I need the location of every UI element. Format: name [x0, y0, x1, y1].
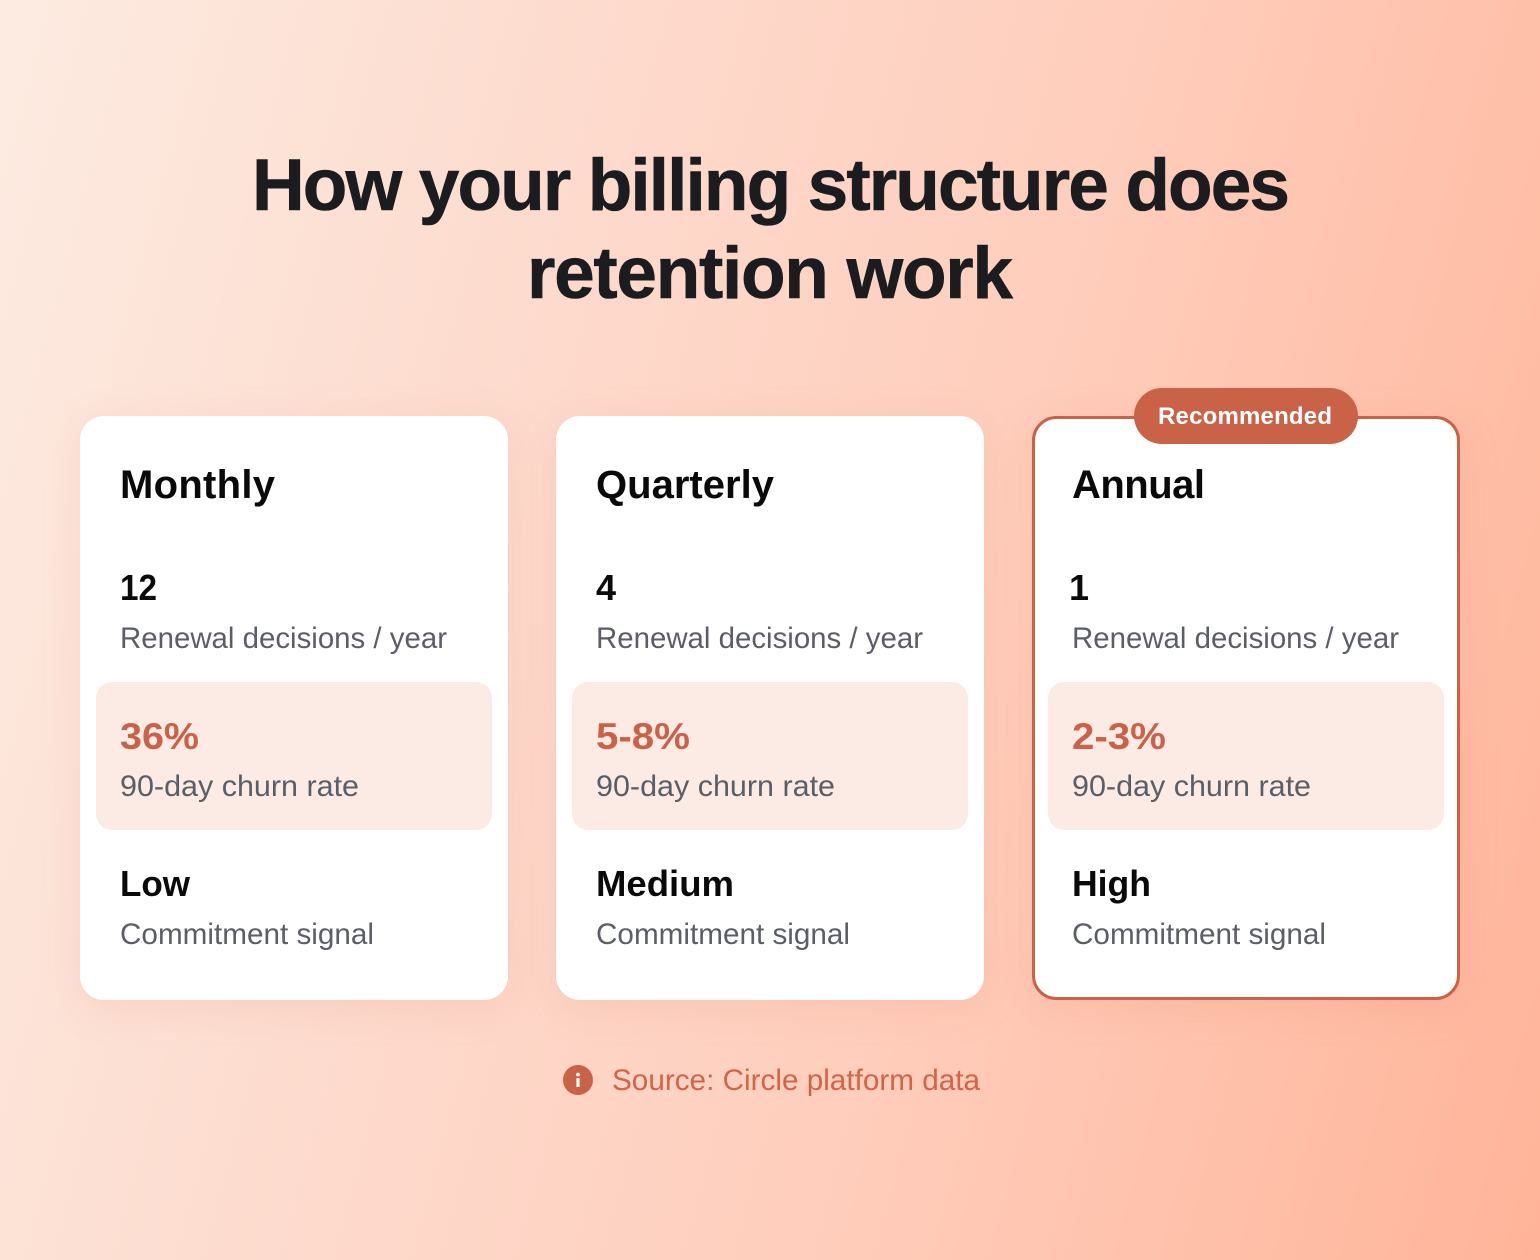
highlight: churn annual: 2-3%: [1072, 716, 1166, 757]
stat: renewal decisions annual: 1: [1069, 567, 1089, 608]
panel: monthly: [80, 416, 508, 1000]
title: retention work: [527, 233, 1013, 314]
stat: renewal decisions quarterly: 4: [596, 567, 616, 608]
stat: renewal decisions monthly: [120, 567, 447, 655]
stat: commitment quarterly: Medium: [596, 863, 734, 904]
heading: annual: Annual: [1072, 463, 1205, 507]
heading: quarterly: Quarterly: [596, 463, 775, 507]
stat: commitment annual: High: [1072, 863, 1151, 904]
highlight: churn quarterly: 90-day churn rate: [596, 770, 835, 803]
title: [252, 145, 1290, 314]
heading: monthly: Monthly: [120, 463, 276, 507]
highlight: churn annual: 90-day churn rate: [1072, 770, 1311, 803]
badge: recommended: Recommended: [1158, 403, 1332, 430]
stat: commitment monthly: Low: [120, 863, 191, 904]
panel: annual: [1034, 388, 1458, 998]
stat: commitment monthly: [120, 863, 374, 951]
title: How your billing structure does: [252, 145, 1290, 226]
stat: renewal decisions quarterly: Renewal decisions / year: [596, 622, 923, 655]
stat: renewal decisions monthly: Renewal decisions / year: [120, 622, 447, 655]
badge: recommended: [1134, 388, 1358, 444]
highlight: churn annual: [1048, 682, 1444, 830]
stat: commitment quarterly: Commitment signal: [596, 918, 850, 951]
highlight: churn monthly: 90-day churn rate: [120, 770, 359, 803]
stat: renewal decisions quarterly: [596, 567, 923, 655]
panel: quarterly: [556, 416, 984, 1000]
highlight: churn quarterly: 5-8%: [596, 716, 690, 757]
highlight: churn quarterly: [572, 682, 968, 830]
stat: commitment quarterly: [596, 863, 850, 951]
highlight: churn monthly: [96, 682, 492, 830]
stat: renewal decisions monthly: 12: [120, 567, 157, 608]
stat: renewal decisions annual: [1069, 567, 1399, 655]
icon: info: [563, 1065, 593, 1095]
stat: commitment monthly: Commitment signal: [120, 918, 374, 951]
highlight: churn monthly: 36%: [120, 716, 199, 757]
source note: Source: Circle platform data: [612, 1064, 980, 1097]
stat: commitment annual: [1072, 863, 1326, 951]
stat: commitment annual: Commitment signal: [1072, 918, 1326, 951]
stat: renewal decisions annual: Renewal decisions / year: [1072, 622, 1399, 655]
